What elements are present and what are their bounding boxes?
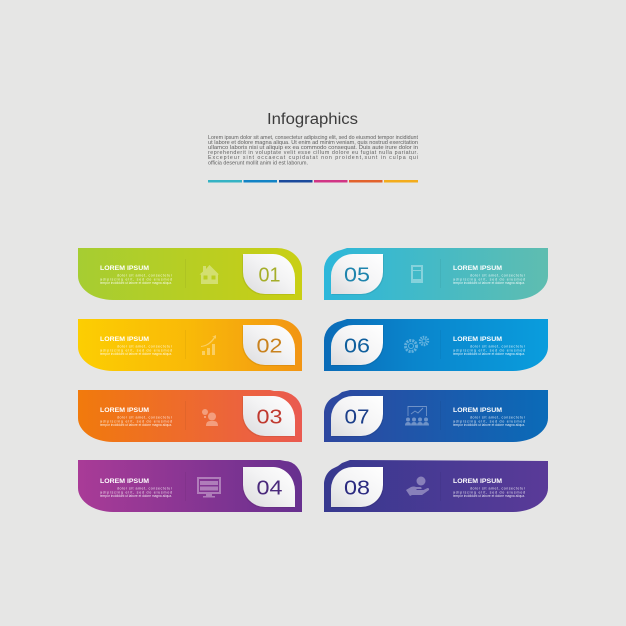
intro text block: Excepteur sint occaecat cupidatat non proident,sunt in culpa qui <box>208 155 418 161</box>
panel: step 01 <box>78 248 302 300</box>
panel: step 03: tempor incididunt ut labore et dolore magna aliqua. <box>100 423 172 427</box>
panel: step 03: adipiscing elit, sed do eiusmod <box>100 420 172 424</box>
colour bar strip <box>208 180 418 182</box>
panel: step 01: dolor sit amet, consectetur <box>117 274 173 278</box>
panel: step 06 <box>324 319 548 371</box>
panel: step 08: 08 <box>344 476 370 500</box>
panel: step 02: dolor sit amet, consectetur <box>117 344 173 348</box>
panel: step 05 <box>324 248 548 300</box>
panel: step 08 <box>324 460 548 512</box>
intro text block: ut labore et dolore magna aliqua. Ut enim ad minim veniam, quis nostrud exercitation <box>208 140 418 146</box>
panel: step 07 <box>324 390 548 442</box>
panel: step 06: adipiscing elit, sed do eiusmod <box>453 348 525 352</box>
intro text block: Lorem ipsum dolor sit amet, consectetur adipiscing elit, sed do eiusmod tempor incididunt <box>208 135 419 141</box>
panel: step 08: LOREM IPSUM <box>453 478 503 485</box>
panel: step 08: tempor incididunt ut labore et dolore magna aliqua. <box>453 494 525 498</box>
panel: step 01: LOREM IPSUM <box>100 265 150 272</box>
panel: step 06: 06 <box>344 334 370 358</box>
intro text block: officia deserunt mollit anim id est laborum. <box>208 160 308 166</box>
panel: step 04: LOREM IPSUM <box>100 478 150 485</box>
panel: step 03: dolor sit amet, consectetur <box>117 416 173 420</box>
panel: step 01: adipiscing elit, sed do eiusmod <box>100 278 172 282</box>
panel: step 04: adipiscing elit, sed do eiusmod <box>100 490 172 494</box>
panel: step 07: 07 <box>344 406 370 428</box>
panel: step 02: LOREM IPSUM <box>100 336 150 343</box>
panel: step 02: adipiscing elit, sed do eiusmod <box>100 348 172 352</box>
panel: step 01: 01 <box>258 264 280 286</box>
panel: step 07: adipiscing elit, sed do eiusmod <box>453 420 525 424</box>
panel: step 05: tempor incididunt ut labore et dolore magna aliqua. <box>453 281 525 285</box>
panel: step 04: dolor sit amet, consectetur <box>117 486 173 490</box>
panel: step 02: tempor incididunt ut labore et dolore magna aliqua. <box>100 352 172 356</box>
panel: step 05: adipiscing elit, sed do eiusmod <box>453 278 525 282</box>
intro text block: ullamco laboris nisi ut aliquip ex ea commodo consequat. Duis aute irure dolor in <box>208 145 418 151</box>
panel: step 08: dolor sit amet, consectetur <box>470 486 526 490</box>
panel: step 08: adipiscing elit, sed do eiusmod <box>453 490 525 494</box>
panel: step 05: 05 <box>344 264 370 286</box>
intro text block <box>208 135 419 166</box>
panel: step 04: 04 <box>256 476 282 500</box>
intro text block: reprehenderit in voluptate velit esse cillum dolore eu fugiat nulla pariatur. <box>208 150 418 156</box>
panel: step 05: dolor sit amet, consectetur <box>470 274 526 278</box>
panel: step 06: tempor incididunt ut labore et dolore magna aliqua. <box>453 352 525 356</box>
panel: step 06: dolor sit amet, consectetur <box>470 344 526 348</box>
panel: step 02 <box>78 319 302 371</box>
panel: step 03: 03 <box>256 406 282 428</box>
panel: step 02: 02 <box>256 334 282 358</box>
panel: step 03 <box>78 390 302 442</box>
panel: step 01: tempor incididunt ut labore et dolore magna aliqua. <box>100 281 172 285</box>
panel: step 07: tempor incididunt ut labore et dolore magna aliqua. <box>453 423 525 427</box>
panel: step 04 <box>78 460 302 512</box>
panel: step 07: dolor sit amet, consectetur <box>470 416 526 420</box>
panel: step 04: tempor incididunt ut labore et dolore magna aliqua. <box>100 494 172 498</box>
panel: step 06: LOREM IPSUM <box>453 336 503 343</box>
panel: step 07: LOREM IPSUM <box>453 407 503 414</box>
title: Infographics <box>267 111 358 128</box>
panel: step 05: LOREM IPSUM <box>453 265 503 272</box>
panel: step 03: LOREM IPSUM <box>100 407 150 414</box>
